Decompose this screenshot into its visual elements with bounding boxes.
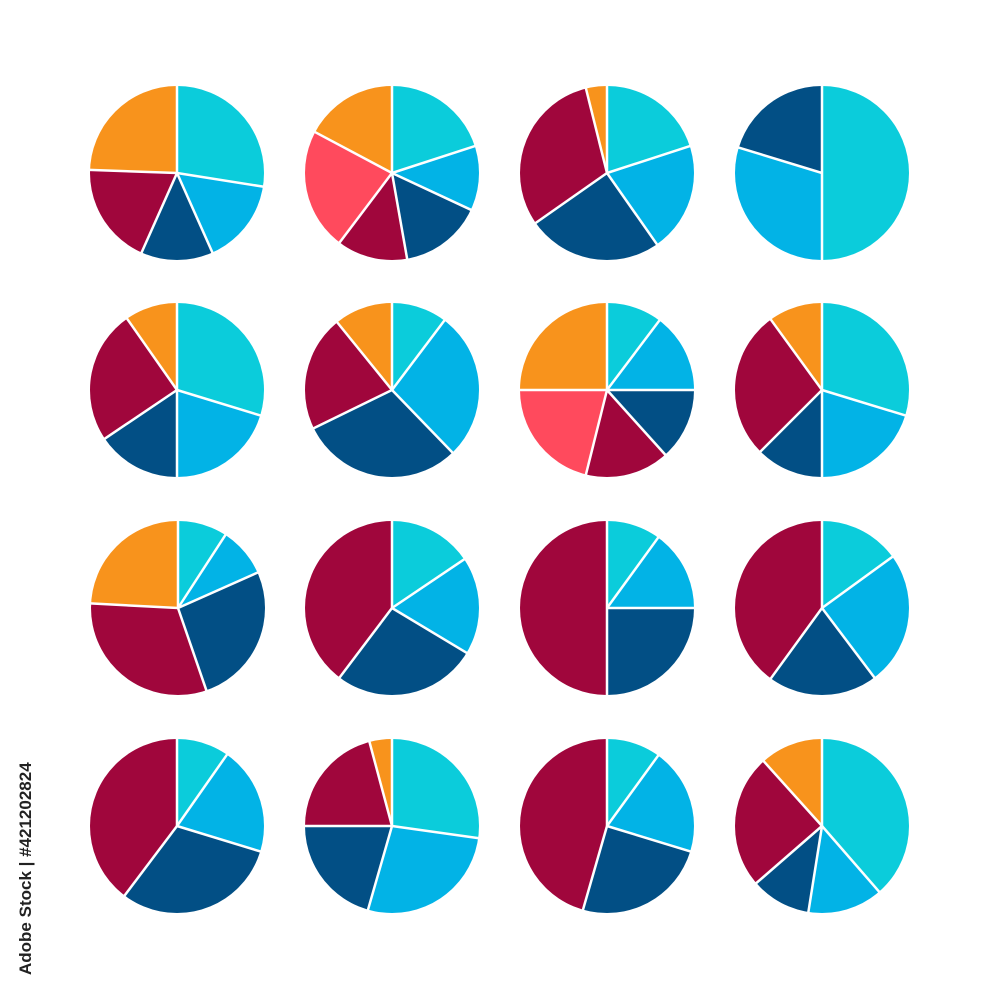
watermark id text: Adobe Stock | #421202824 [16,762,35,975]
pie 3 [520,86,694,260]
pie 10 [305,521,479,695]
pie 13 [90,739,264,913]
pie 11 [520,521,694,695]
pie 9 [91,521,265,695]
pie 2 [305,86,479,260]
pie 6 [305,303,479,477]
pie 4 [735,86,909,260]
pie 1 [90,86,264,260]
pie 7 [520,303,694,477]
pie 5 [90,303,264,477]
pie 15 [520,739,694,913]
pie 12 [735,521,909,695]
pie 16 [735,739,909,913]
pie 8 [735,303,909,477]
pie 14 [305,739,479,913]
